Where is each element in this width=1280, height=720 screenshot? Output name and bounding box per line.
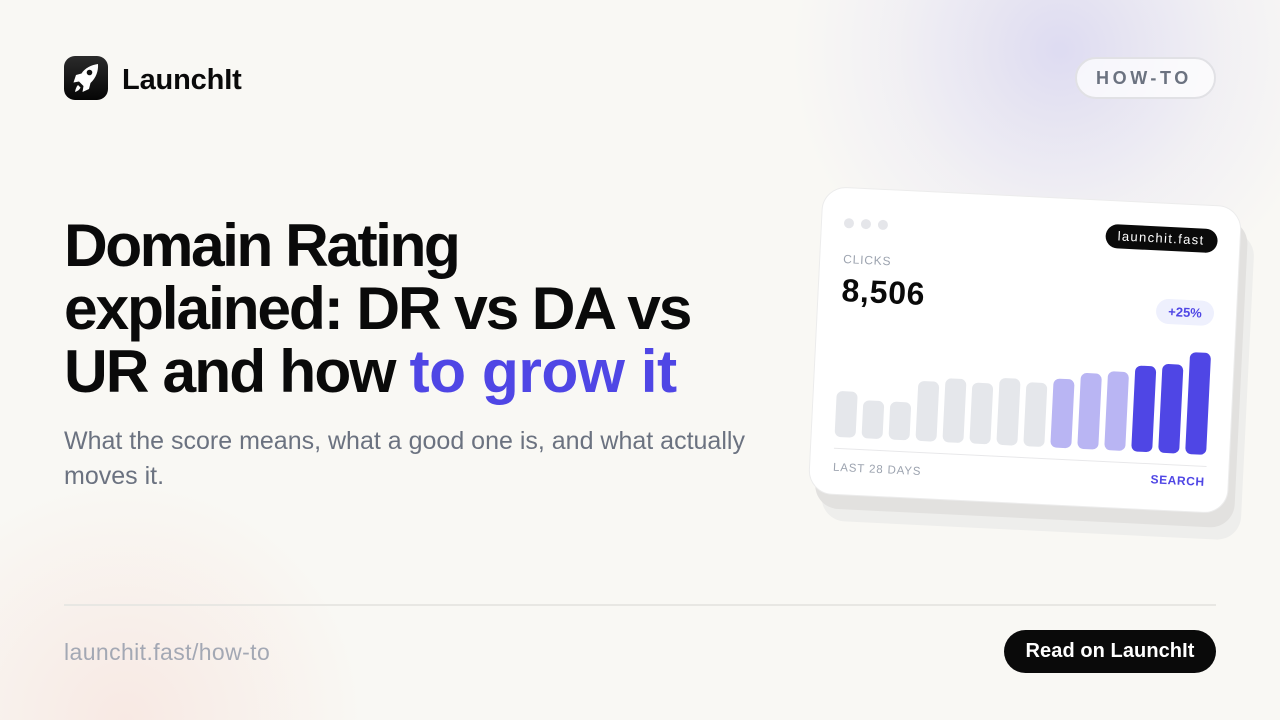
brand name: LaunchIt — [122, 64, 242, 96]
subtitle — [64, 426, 745, 490]
category pill — [1075, 57, 1216, 99]
source label: SEARCH — [1150, 472, 1205, 489]
growth badge: +25% — [1167, 303, 1202, 320]
title: Domain Rating — [64, 210, 458, 278]
background glow: blue — [790, 0, 1280, 320]
brand logo — [64, 56, 242, 100]
growth badge — [1155, 298, 1214, 326]
title: explained: DR vs DA vs — [64, 274, 690, 342]
metric label: CLICKS — [842, 252, 891, 268]
pill label: HOW-TO — [1096, 68, 1192, 88]
bar chart — [834, 352, 1211, 455]
title: UR and how to grow it — [64, 336, 677, 404]
background glow: red — [0, 480, 365, 720]
call to action button — [1004, 630, 1216, 673]
period label: LAST 28 DAYS — [832, 461, 921, 478]
footer url: launchit.fast/how-to — [64, 639, 270, 665]
call to action button: Read on LaunchIt — [1026, 640, 1194, 662]
metric value: 8,506 — [840, 271, 926, 312]
icon: rocket — [64, 56, 108, 100]
subtitle: What the score means, what a good one is, and what actually — [64, 426, 745, 454]
title — [64, 210, 690, 405]
domain pill — [1104, 223, 1217, 253]
subtitle: moves it. — [64, 462, 164, 490]
domain pill: launchit.fast — [1117, 228, 1204, 247]
panel: analytics card — [809, 187, 1254, 540]
